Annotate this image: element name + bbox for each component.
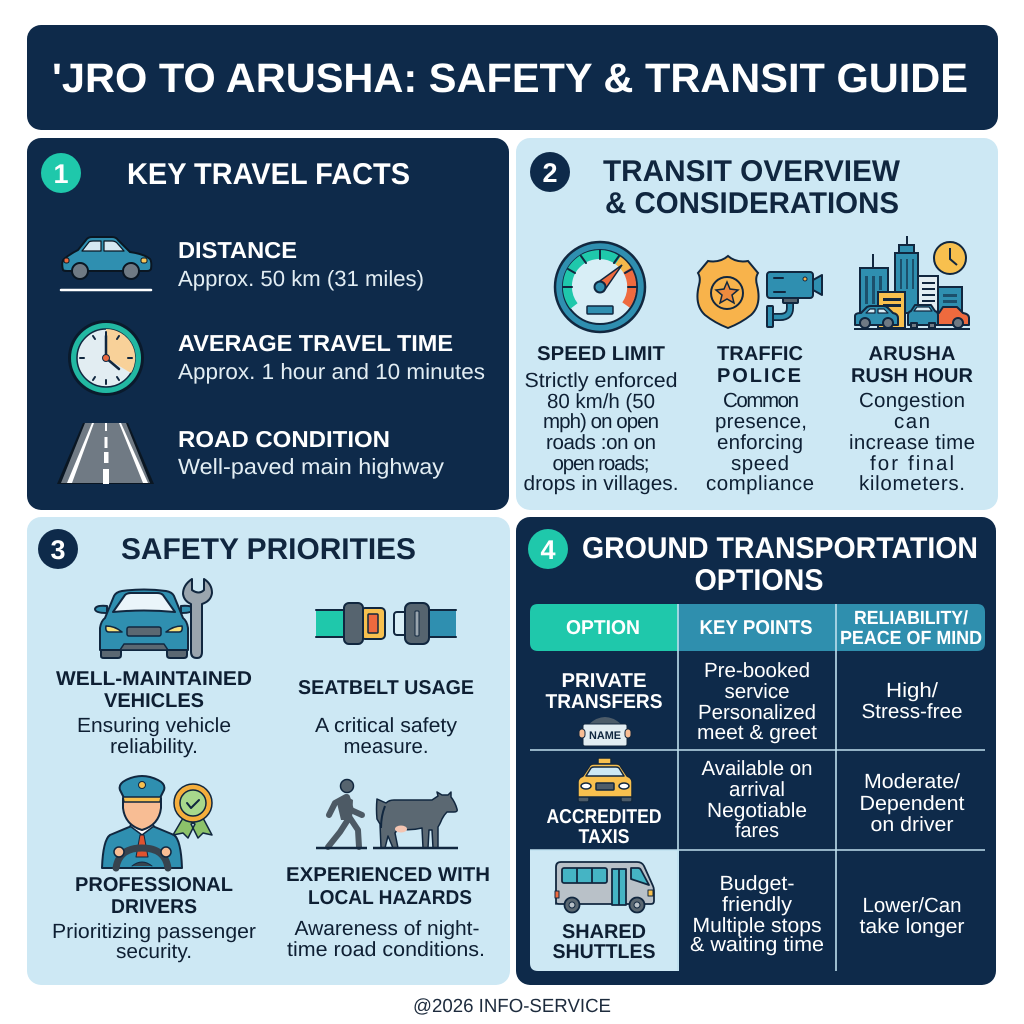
row: private transfers: Personalized — [698, 701, 816, 724]
text: seatbelt usage — [298, 677, 474, 758]
text: average travel time: Approx. 1 hour and 10 minutes — [178, 359, 485, 384]
column: traffic police — [706, 343, 814, 495]
column: speed limit: roads :on on — [546, 431, 656, 454]
heading: ground transportation options: OPTIONS — [694, 564, 824, 597]
row: shared shuttles: & waiting time — [690, 933, 824, 956]
number badge 4: 4 — [540, 535, 556, 565]
column: traffic police: compliance — [706, 472, 814, 495]
text: well-maintained vehicles: Ensuring vehicle — [77, 714, 231, 737]
title banner — [27, 25, 998, 130]
icon: speedometer — [555, 242, 645, 332]
column: arusha rush hour — [849, 343, 975, 495]
row: private transfers: PRIVATE — [562, 670, 646, 692]
icon: road — [57, 423, 154, 484]
text: professional drivers — [52, 874, 256, 963]
number badge 3: 3 — [50, 535, 66, 565]
column: traffic police: enforcing — [717, 431, 803, 454]
row: shared shuttles: friendly — [722, 893, 793, 916]
column: speed limit: open roads; — [552, 452, 650, 475]
heading: key travel facts: KEY TRAVEL FACTS — [127, 158, 410, 191]
column: speed limit: drops in villages. — [524, 472, 678, 495]
row: accredited taxis: Available on — [702, 757, 812, 780]
number badge 1 — [41, 153, 81, 193]
text: well-maintained vehicles: VEHICLES — [104, 690, 204, 712]
heading: ground transportation options: GROUND TRANSPORTATION — [582, 532, 978, 565]
row: shared shuttles: SHARED — [562, 921, 646, 943]
icon: city rush hour — [854, 236, 970, 329]
text: well-maintained vehicles: reliability. — [110, 735, 198, 758]
row: accredited taxis: Moderate/ — [864, 770, 960, 793]
row: accredited taxis: Negotiable — [707, 799, 807, 822]
row: shared shuttles: Lower/Can — [862, 894, 962, 917]
row: shared shuttles — [552, 862, 965, 963]
number badge 2 — [530, 152, 570, 192]
icon: name sign: NAME — [589, 730, 621, 742]
row: private transfers: Pre-booked — [704, 659, 810, 682]
text: professional drivers: DRIVERS — [111, 896, 197, 918]
text: experienced with local hazards: time road conditions. — [287, 938, 485, 961]
text: distance: DISTANCE — [178, 237, 297, 263]
panel: safety priorities — [27, 517, 510, 985]
column: arusha rush hour: kilometers. — [859, 472, 965, 495]
row: accredited taxis — [546, 757, 965, 848]
row: accredited taxis: fares — [735, 819, 779, 842]
row: private transfers: TRANSFERS — [546, 691, 662, 713]
text: distance — [178, 237, 424, 291]
column: traffic police: presence, — [715, 410, 807, 433]
column: traffic police: POLICE — [717, 365, 801, 387]
row: private transfers: meet & greet — [697, 721, 817, 744]
row: accredited taxis: on driver — [870, 813, 954, 836]
row: shared shuttles: Multiple stops — [692, 914, 822, 937]
column: traffic police: TRAFFIC — [717, 343, 803, 365]
text: seatbelt usage: SEATBELT USAGE — [298, 677, 474, 699]
table header: RELIABILITY/ — [854, 608, 969, 629]
shared shuttles highlight cell — [530, 850, 679, 971]
panel: ground transportation options — [516, 517, 996, 985]
heading: ground transportation options — [582, 532, 978, 597]
row: accredited taxis: ACCREDITED — [546, 806, 662, 828]
text: road condition: Well-paved main highway — [178, 454, 444, 479]
column: arusha rush hour: ARUSHA — [868, 343, 956, 365]
icon: professional driver with rosette — [102, 776, 212, 868]
panel: transit overview and considerations — [516, 138, 998, 510]
column: arusha rush hour: can — [894, 410, 930, 433]
heading: transit overview: TRANSIT OVERVIEW — [603, 155, 901, 188]
row: private transfers — [546, 659, 962, 746]
icon: taxi — [578, 758, 632, 802]
text: experienced with local hazards: EXPERIENCED WITH — [286, 864, 490, 886]
row: shared shuttles: SHUTTLES — [552, 941, 656, 963]
heading: transit overview — [603, 155, 901, 220]
text: average travel time — [178, 330, 485, 384]
text: distance: Approx. 50 km (31 miles) — [178, 266, 424, 291]
heading: transit overview: & CONSIDERATIONS — [605, 187, 899, 220]
icon: car on road — [61, 237, 151, 290]
row: shared shuttles: Budget- — [720, 872, 794, 895]
row: private transfers: Stress-free — [862, 700, 962, 723]
icon: shuttle bus — [555, 862, 654, 912]
column: arusha rush hour: Congestion — [859, 389, 965, 412]
column: speed limit — [524, 343, 678, 495]
row: accredited taxis: arrival — [729, 778, 785, 801]
icon: name sign — [579, 717, 631, 746]
row: shared shuttles: take longer — [860, 915, 965, 938]
text: professional drivers: security. — [116, 940, 192, 963]
number badge 1: 1 — [53, 159, 69, 189]
text: experienced with local hazards: Awareness of night- — [294, 917, 480, 940]
number badge 2: 2 — [542, 158, 558, 188]
table header: KEY POINTS — [700, 617, 812, 639]
number badge 3 — [38, 529, 78, 569]
panel: key travel facts — [27, 138, 509, 510]
table header — [530, 604, 985, 651]
text: average travel time: AVERAGE TRAVEL TIME — [178, 330, 453, 356]
icon: car and wrench — [95, 579, 212, 658]
column: arusha rush hour: RUSH HOUR — [851, 365, 974, 387]
row: private transfers: High/ — [886, 679, 938, 702]
icon: police badge — [697, 256, 759, 328]
number badge 4 — [528, 529, 568, 569]
row: accredited taxis: Dependent — [860, 792, 965, 815]
icon: clock — [68, 320, 144, 396]
text: experienced with local hazards — [286, 864, 490, 961]
text: road condition: ROAD CONDITION — [178, 426, 390, 452]
text: professional drivers: Prioritizing passenger — [52, 920, 256, 943]
column: arusha rush hour: increase time — [849, 431, 975, 454]
text: experienced with local hazards: LOCAL HAZARDS — [308, 887, 472, 909]
table header: OPTION — [566, 617, 640, 639]
column: speed limit: mph) on open — [543, 410, 659, 433]
column: traffic police: Common — [723, 389, 799, 412]
table header: PEACE OF MIND — [840, 628, 982, 649]
column: speed limit: 80 km/h (50 — [547, 390, 655, 413]
column: arusha rush hour: for final — [870, 452, 954, 475]
footer credit: @2026 INFO-SERVICE — [413, 996, 611, 1017]
icon: traffic camera — [767, 272, 822, 327]
text: well-maintained vehicles — [56, 668, 252, 758]
row: accredited taxis: TAXIS — [578, 826, 630, 848]
column: speed limit: SPEED LIMIT — [537, 343, 665, 365]
column: traffic police: speed — [731, 452, 789, 475]
icon: pedestrian and cow — [316, 780, 458, 848]
column: speed limit: Strictly enforced — [524, 369, 678, 392]
table grid lines — [530, 604, 985, 971]
title banner: 'JRO TO ARUSHA: SAFETY & TRANSIT GUIDE — [52, 55, 968, 101]
text: professional drivers: PROFESSIONAL — [75, 874, 233, 896]
icon: seatbelt — [316, 603, 456, 644]
text: seatbelt usage: measure. — [344, 735, 428, 758]
text: seatbelt usage: A critical safety — [315, 714, 458, 737]
heading: safety priorities: SAFETY PRIORITIES — [121, 533, 416, 566]
text: well-maintained vehicles: WELL-MAINTAINED — [56, 668, 252, 690]
text: road condition — [178, 426, 444, 479]
row: private transfers: service — [724, 680, 790, 703]
